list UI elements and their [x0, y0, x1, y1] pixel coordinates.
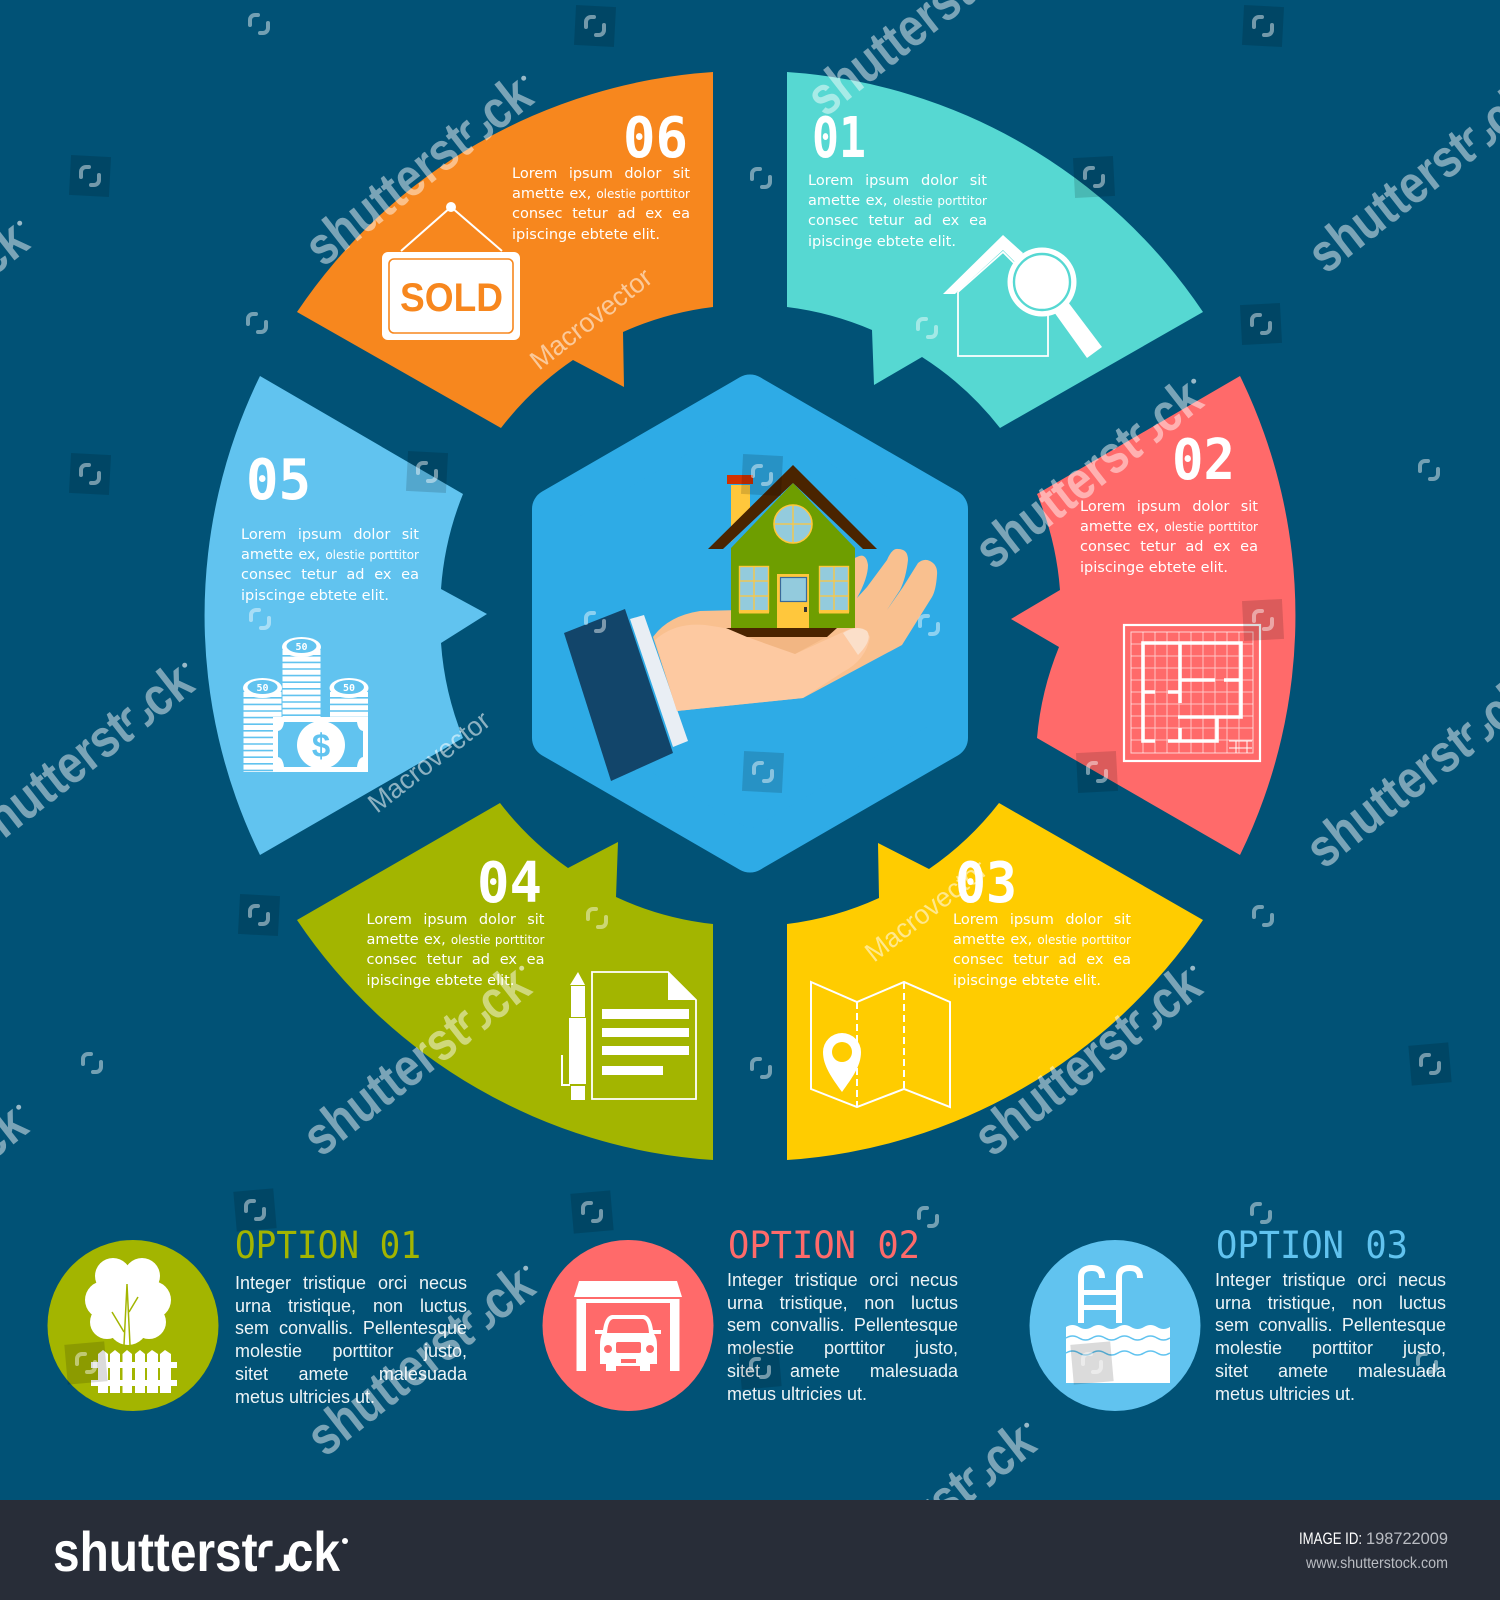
panel: 06 orange segment	[297, 72, 713, 428]
panel: option 01	[48, 1224, 467, 1417]
panel: centre hexagon	[552, 394, 948, 852]
panel: option 02: metus ultricies ut.	[727, 1384, 867, 1404]
panel: option 03	[1030, 1224, 1446, 1414]
panel: 03 yellow segment: amette ex, olestie porttitor	[953, 932, 1131, 948]
panel: 01 teal segment: 01	[812, 106, 866, 171]
panel: option 02: sem convallis. Pellentesque	[727, 1315, 958, 1335]
icon: house with magnifier	[943, 235, 1102, 358]
watermark: shutterstock wordmarks: shutterstock	[295, 1253, 546, 1467]
panel: 04 green segment: Lorem ipsum dolor sit	[366, 912, 544, 928]
panel: option 03: metus ultricies ut.	[1215, 1384, 1355, 1404]
panel: option 03: Integer tristique orci necus	[1215, 1270, 1446, 1290]
panel: 03 yellow segment: consec tetur ad ex ea	[953, 952, 1131, 968]
panel: option 01: sem convallis. Pellentesque	[235, 1318, 467, 1338]
panel: option 03: sitet amete malesuada	[1215, 1361, 1446, 1381]
panel: option 02	[542, 1224, 958, 1414]
panel: 06 orange segment: consec tetur ad ex ea	[512, 206, 690, 222]
watermark: Macrovector credits: Macrovector	[362, 705, 496, 819]
icon: coins and banknote: 50	[343, 683, 355, 694]
icon: coins and banknote: $	[312, 727, 330, 764]
panel: 01 teal segment	[787, 72, 1203, 428]
panel: option 01: sitet amete malesuada	[235, 1364, 467, 1384]
panel: 01 teal segment: consec tetur ad ex ea	[808, 213, 987, 229]
icon: swimming pool ladder	[1066, 1268, 1170, 1383]
watermark: shutterstock wordmarks: shutterstock	[962, 953, 1213, 1167]
panel: option 03: sem convallis. Pellentesque	[1215, 1315, 1446, 1335]
panel: 03 yellow segment: Lorem ipsum dolor sit	[953, 912, 1131, 928]
panel: 06 orange segment: ipiscinge ebtete elit.	[512, 227, 660, 243]
icon: car in garage	[574, 1281, 682, 1371]
panel: option 02: OPTION 02	[728, 1224, 920, 1267]
panel: 05 light blue segment: amette ex, olestie porttitor	[241, 547, 419, 563]
panel: 04 green segment	[297, 803, 713, 1160]
image id: www.shutterstock.com	[1305, 1555, 1448, 1572]
panel: option 02: urna tristique, non luctus	[727, 1293, 958, 1313]
panel: 02 red segment: consec tetur ad ex ea	[1080, 539, 1258, 555]
panel: 03 yellow segment: ipiscinge ebtete elit.	[953, 973, 1101, 989]
icon: coins and banknote: 50	[295, 642, 308, 653]
watermark: Macrovector credits: Macrovector	[859, 854, 993, 968]
panel: 04 green segment: ipiscinge ebtete elit.	[366, 973, 514, 989]
footer bar	[0, 1500, 1500, 1600]
icon: hand holding house	[564, 465, 937, 781]
panel: 05 light blue segment: ipiscinge ebtete elit.	[241, 588, 389, 604]
shutterstock logo: shutterstock	[53, 1520, 341, 1583]
panel: 02 red segment: amette ex, olestie porttitor	[1080, 519, 1258, 535]
panel: 02 red segment: Lorem ipsum dolor sit	[1080, 499, 1258, 515]
panel: option 01: OPTION 01	[235, 1224, 421, 1267]
panel: 06 orange segment: 06	[623, 106, 688, 171]
icon: floor plan	[1124, 625, 1260, 761]
panel: 04 green segment: 04	[477, 851, 542, 916]
panel: 02 red segment: 02	[1172, 428, 1235, 493]
panel: option 03: OPTION 03	[1216, 1224, 1408, 1267]
panel: 01 teal segment: amette ex, olestie porttitor	[808, 193, 987, 209]
panel: 05 light blue segment: Lorem ipsum dolor sit	[241, 527, 419, 543]
watermark: shutterstock wordmarks: shutterstock	[963, 366, 1214, 580]
panel: option 03: molestie porttitor justo,	[1215, 1338, 1446, 1358]
panel: 01 teal segment: Lorem ipsum dolor sit	[808, 173, 987, 189]
panel: option 02: Integer tristique orci necus	[727, 1270, 958, 1290]
image id	[1299, 1529, 1448, 1572]
icon: map with pin	[811, 982, 950, 1107]
image id: IMAGE ID:	[1299, 1529, 1362, 1548]
icon: coins and banknote: 50	[256, 683, 269, 694]
panel: option 01: molestie porttitor justo,	[235, 1341, 467, 1361]
panel: option 01: metus ultricies ut.	[235, 1387, 375, 1407]
panel: option 03: urna tristique, non luctus	[1215, 1293, 1446, 1313]
panel: option 01: Integer tristique orci necus	[235, 1273, 467, 1293]
panel: 05 light blue segment	[205, 376, 487, 855]
panel: 06 orange segment: amette ex, olestie porttitor	[512, 186, 690, 202]
icon: coins and banknote	[243, 637, 368, 772]
watermark: Macrovector credits	[362, 262, 993, 968]
panel: 05 light blue segment: consec tetur ad ex ea	[241, 567, 419, 583]
panel: 06 orange segment: Lorem ipsum dolor sit	[512, 166, 690, 182]
panel: 02 red segment: ipiscinge ebtete elit.	[1080, 560, 1228, 576]
icon: tree and fence	[85, 1258, 177, 1393]
panel: option 02: sitet amete malesuada	[727, 1361, 958, 1381]
panel: 01 teal segment: ipiscinge ebtete elit.	[808, 234, 956, 250]
panel: 03 yellow segment: 03	[955, 851, 1017, 916]
panel: 04 green segment: consec tetur ad ex ea	[366, 952, 544, 968]
icon: sold sign: SOLD	[400, 276, 503, 320]
panel: option 02: molestie porttitor justo,	[727, 1338, 958, 1358]
watermark: Macrovector credits: Macrovector	[524, 262, 658, 376]
watermark: shutterstock wordmarks: shutterstock	[293, 63, 544, 277]
panel: 03 yellow segment	[787, 803, 1203, 1160]
panel: 02 red segment	[1011, 376, 1295, 855]
panel: option 01: urna tristique, non luctus	[235, 1296, 467, 1316]
panel: 05 light blue segment: 05	[246, 448, 311, 513]
panel: 04 green segment: amette ex, olestie porttitor	[366, 932, 544, 948]
icon: sold sign	[382, 202, 520, 340]
icon: document and pen	[562, 972, 696, 1100]
image id: 198722009	[1366, 1529, 1448, 1548]
watermark: shutterstock wordmarks: shutterstock	[291, 953, 542, 1167]
